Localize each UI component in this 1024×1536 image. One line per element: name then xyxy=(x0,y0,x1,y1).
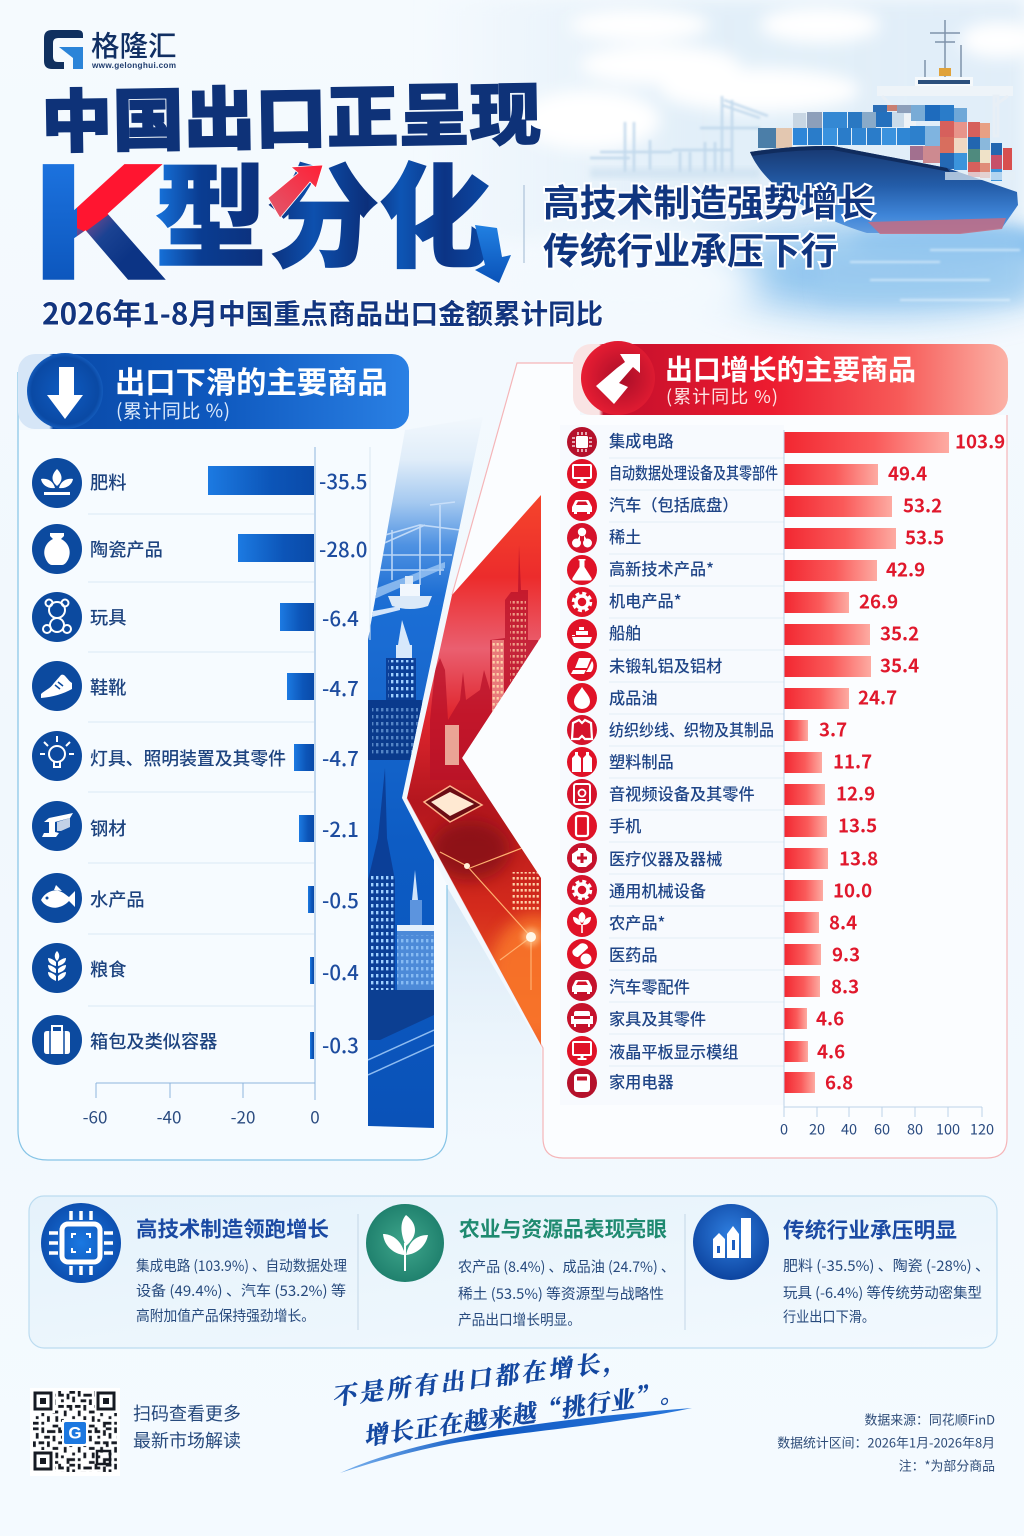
row: 汽车零配件 xyxy=(567,971,859,1001)
bar xyxy=(784,880,823,901)
axis: 0 xyxy=(780,1119,788,1140)
value: 8.3 xyxy=(831,972,859,999)
body text xyxy=(458,1256,675,1330)
bar xyxy=(294,744,314,771)
takeaway: agriculture and resources xyxy=(366,1204,675,1330)
label: 音视频设备及其零件 xyxy=(609,781,755,805)
row tint xyxy=(560,425,784,1105)
value: -4.7 xyxy=(322,742,359,772)
label: 集成电路 xyxy=(609,428,674,452)
handwritten slogan: 不是所有出口都在增长， xyxy=(332,1341,629,1412)
container ship xyxy=(750,20,1018,234)
QR caption xyxy=(133,1400,241,1453)
icon: rare earth xyxy=(567,523,597,553)
takeaway: traditional xyxy=(693,1204,990,1327)
icon: up arrow xyxy=(596,354,640,404)
value: 26.9 xyxy=(859,587,898,614)
panel: takeaways xyxy=(29,1196,997,1348)
low tower xyxy=(368,768,395,1000)
value: -2.1 xyxy=(322,813,359,843)
row: 船舶 xyxy=(567,619,919,649)
label: 箱包及类似容器 xyxy=(90,1028,217,1054)
bar xyxy=(784,432,949,453)
handwritten slogan: 增长正在越来越“挑行业”。 xyxy=(365,1372,686,1452)
port cranes xyxy=(590,96,768,172)
subtitle: 2026年1-8月中国重点商品出口金额累计同比 xyxy=(42,290,603,333)
value: 10.0 xyxy=(833,876,872,903)
body text: 行业出口下滑。 xyxy=(783,1306,875,1327)
row: 陶瓷产品 xyxy=(32,524,367,574)
bar xyxy=(784,624,870,645)
value: 9.3 xyxy=(832,940,860,967)
red K arms city image xyxy=(407,495,541,1045)
panel background xyxy=(18,372,483,1160)
skyline xyxy=(430,545,538,780)
value: 103.9 xyxy=(955,427,1005,454)
row: 家具及其零件 xyxy=(567,1003,844,1033)
axis: 20 xyxy=(809,1119,825,1140)
bar xyxy=(784,688,849,709)
value: 13.5 xyxy=(838,811,877,838)
icon: car xyxy=(567,971,597,1001)
header: falling xyxy=(18,353,409,429)
label: 粮食 xyxy=(90,956,126,982)
icon: audio video xyxy=(567,779,597,809)
icon: monitor xyxy=(567,459,597,489)
label: 汽车零配件 xyxy=(609,974,690,998)
bar xyxy=(784,912,819,933)
value: -6.4 xyxy=(322,602,359,632)
panel frame xyxy=(407,363,1007,1158)
blue K stem city image xyxy=(368,417,483,1128)
title line 2: K型分化 xyxy=(34,128,511,311)
icon: gear xyxy=(567,587,597,617)
row: 通用机械设备 xyxy=(567,875,872,905)
row: 高新技术产品* xyxy=(567,555,925,585)
value: 6.8 xyxy=(825,1068,853,1095)
hull xyxy=(750,146,1018,233)
label: 鞋靴 xyxy=(90,674,126,700)
axis: -60 xyxy=(83,1103,107,1128)
bar xyxy=(784,720,808,741)
big letter K: K xyxy=(34,132,161,311)
icon: fish xyxy=(32,873,82,923)
body text: 玩具 (-6.4%) 等传统劳动密集型 xyxy=(783,1282,982,1303)
value: 12.9 xyxy=(836,779,875,806)
heading: 农业与资源品表现亮眼 xyxy=(459,1212,667,1244)
label: 水产品 xyxy=(90,886,145,912)
bar xyxy=(784,944,821,965)
row: 灯具、照明装置及其零件 xyxy=(32,731,359,781)
body text: 高附加值产品保持强劲增长。 xyxy=(136,1305,315,1326)
heading: 高技术制造领跑增长 xyxy=(136,1212,329,1244)
label: 肥料 xyxy=(90,469,126,495)
header title: 出口增长的主要商品 xyxy=(665,348,916,388)
QR caption: 扫码查看更多 xyxy=(133,1400,241,1426)
QR code xyxy=(30,1388,120,1476)
label: 高新技术产品* xyxy=(609,556,714,580)
value: 35.4 xyxy=(880,651,919,678)
lower glow xyxy=(430,820,510,880)
label: 家用电器 xyxy=(609,1069,674,1093)
axis: 100 xyxy=(936,1119,960,1140)
icon: monitor xyxy=(567,1036,597,1066)
source notes xyxy=(777,1410,995,1475)
bar xyxy=(784,976,820,997)
icon: plant xyxy=(366,1204,444,1282)
icon: teddy bear xyxy=(32,592,82,642)
icon: sofa xyxy=(567,1003,597,1033)
icon: ship xyxy=(567,619,597,649)
logo wordmark: 格隆汇 xyxy=(91,24,177,65)
logo mark xyxy=(44,30,83,69)
value: -0.5 xyxy=(322,884,359,914)
bar chart: rising xyxy=(567,427,1005,1140)
logo url: www.gelonghui.com xyxy=(91,61,176,70)
icon: chip xyxy=(41,1203,121,1283)
bar xyxy=(784,496,892,517)
bar xyxy=(208,466,314,495)
value: 11.7 xyxy=(833,747,872,774)
panel: exports falling xyxy=(18,353,483,1160)
bar xyxy=(784,1072,815,1093)
blue down arrow xyxy=(475,225,511,283)
value: -0.4 xyxy=(322,956,359,986)
panel background xyxy=(407,363,1007,1158)
source notes: 注：*为部分商品 xyxy=(899,1456,995,1475)
value: 3.7 xyxy=(819,715,847,742)
label: 通用机械设备 xyxy=(609,878,706,902)
label: 玩具 xyxy=(90,604,126,630)
bar xyxy=(784,528,896,549)
bar xyxy=(287,673,314,700)
bar xyxy=(310,957,314,984)
headline: high-tech and traditional xyxy=(543,173,874,275)
logo: 格隆汇 xyxy=(44,24,177,70)
bar xyxy=(784,464,878,485)
axis: 80 xyxy=(907,1119,923,1140)
card background xyxy=(29,1196,997,1348)
icon: home appliance xyxy=(567,1068,597,1098)
label: 钢材 xyxy=(90,815,126,841)
icon: gear xyxy=(567,875,597,905)
label: 船舶 xyxy=(609,620,641,644)
centre shading below K xyxy=(447,887,543,1160)
bar xyxy=(299,815,314,842)
row: 鞋靴 xyxy=(32,661,359,711)
bar xyxy=(784,1041,808,1062)
row: 自动数据处理设备及其零部件 xyxy=(567,459,927,489)
bar xyxy=(280,603,314,631)
row: 医药品 xyxy=(567,939,860,969)
icon: jacket xyxy=(567,715,597,745)
panel frame xyxy=(18,372,447,1160)
takeaway: high-tech xyxy=(41,1203,347,1326)
row: 汽车（包括底盘） xyxy=(567,491,942,521)
title line 1: 中国出口正呈现 xyxy=(40,59,542,166)
QR caption: 最新市场解读 xyxy=(133,1427,241,1453)
icon: shoe xyxy=(32,661,82,711)
value: -35.5 xyxy=(319,465,367,495)
bar xyxy=(308,886,314,913)
axis: 60 xyxy=(874,1119,890,1140)
label: 汽车（包括底盘） xyxy=(609,492,738,516)
value: -0.3 xyxy=(322,1029,359,1059)
axis xyxy=(780,430,994,1140)
row: 箱包及类似容器 xyxy=(32,1015,359,1065)
icon: wheat xyxy=(32,943,82,993)
value: 4.6 xyxy=(816,1004,844,1031)
bar xyxy=(784,656,871,677)
header: rising xyxy=(573,341,1008,415)
bar xyxy=(784,848,828,869)
axis xyxy=(83,447,320,1128)
icon: steel beam xyxy=(32,801,82,851)
icon: flask xyxy=(567,555,597,585)
row: 粮食 xyxy=(32,943,359,993)
row: 音视频设备及其零件 xyxy=(567,779,875,809)
icon: oil drop xyxy=(567,683,597,713)
value: 35.2 xyxy=(880,619,919,646)
value: -28.0 xyxy=(319,533,367,563)
row: 纺织纱线、织物及其制品 xyxy=(567,715,847,745)
bar xyxy=(784,592,849,613)
label: 塑料制品 xyxy=(609,749,674,773)
label: 农产品* xyxy=(609,910,665,934)
row: 医疗仪器及器械 xyxy=(567,843,878,873)
axis: -40 xyxy=(157,1103,181,1128)
icon: sprout xyxy=(32,458,82,508)
icon: car xyxy=(567,491,597,521)
body text: 产品出口增长明显。 xyxy=(458,1309,581,1330)
label: 未锻轧铝及铝材 xyxy=(609,653,722,677)
label: 自动数据处理设备及其零部件 xyxy=(609,460,778,484)
row: 塑料制品 xyxy=(567,747,872,777)
source notes: 数据统计区间：2026年1月-2026年8月 xyxy=(777,1433,995,1452)
body text xyxy=(136,1255,347,1326)
handwritten slogan xyxy=(332,1341,686,1452)
headline: high-tech and traditional: 传统行业承压下行 xyxy=(543,221,837,275)
label: 手机 xyxy=(609,813,641,837)
body text: 集成电路 (103.9%) 、自动数据处理 xyxy=(136,1255,347,1276)
icon: light bulb xyxy=(32,731,82,781)
icon: leaf xyxy=(567,907,597,937)
icon: down arrow xyxy=(47,367,83,419)
hero background: sky, port, container ship and sea xyxy=(420,0,1024,340)
axis: 0 xyxy=(310,1103,320,1128)
bar xyxy=(784,784,825,805)
finder squares xyxy=(33,1391,117,1472)
label: 陶瓷产品 xyxy=(90,536,163,562)
header badge xyxy=(27,353,103,429)
row: 钢材 xyxy=(32,801,359,851)
bar xyxy=(784,752,822,773)
icon: pill xyxy=(567,939,597,969)
row: 未锻轧铝及铝材 xyxy=(567,651,919,681)
body text xyxy=(783,1255,990,1327)
value: 24.7 xyxy=(858,683,897,710)
ship xyxy=(388,596,432,609)
label: 医疗仪器及器械 xyxy=(609,846,722,870)
icon: vase xyxy=(32,524,82,574)
bar xyxy=(784,560,877,581)
label: 灯具、照明装置及其零件 xyxy=(90,745,286,771)
bar xyxy=(310,1032,314,1059)
icon: factory buildings xyxy=(693,1204,769,1280)
型分化: 型分化 xyxy=(155,128,491,290)
label: 稀土 xyxy=(609,524,641,548)
row: 手机 xyxy=(567,811,877,841)
icon: phone xyxy=(567,811,597,841)
bar chart: falling xyxy=(32,447,370,1128)
bar xyxy=(784,816,827,837)
value: 8.4 xyxy=(829,908,857,935)
axis: 40 xyxy=(841,1119,857,1140)
axis: -20 xyxy=(231,1103,255,1128)
label: 家具及其零件 xyxy=(609,1006,706,1030)
port xyxy=(374,502,460,585)
label: 液晶平板显示模组 xyxy=(609,1039,738,1063)
row: 玩具 xyxy=(32,592,359,642)
header title: 出口下滑的主要商品 xyxy=(115,358,388,402)
headline: high-tech and traditional: 高技术制造强势增长 xyxy=(543,173,874,227)
chip xyxy=(424,786,482,822)
body text: 农产品 (8.4%) 、成品油 (24.7%) 、 xyxy=(458,1256,675,1277)
header badge xyxy=(581,341,655,415)
value: 42.9 xyxy=(886,555,925,582)
axis: 120 xyxy=(970,1119,994,1140)
row: 水产品 xyxy=(32,873,359,923)
bar xyxy=(784,1008,807,1029)
label: 成品油 xyxy=(609,685,658,709)
value: -4.7 xyxy=(322,672,359,702)
red up arrow xyxy=(268,165,323,218)
row: 稀土 xyxy=(567,523,944,553)
mast and bridge xyxy=(925,20,961,80)
heading: 传统行业承压明显 xyxy=(783,1214,957,1244)
header note: (累计同比 %) xyxy=(116,396,230,423)
label: 纺织纱线、织物及其制品 xyxy=(609,717,774,741)
brush stroke underline xyxy=(340,1408,692,1473)
panel: exports rising xyxy=(407,341,1008,1158)
row: 农产品* xyxy=(567,907,857,937)
tower xyxy=(396,620,412,658)
row: 肥料 xyxy=(32,458,367,508)
label: 医药品 xyxy=(609,942,658,966)
row: 机电产品* xyxy=(567,587,898,617)
value: 53.2 xyxy=(903,491,942,518)
row: 家用电器 xyxy=(567,1068,853,1098)
value: 13.8 xyxy=(839,844,878,871)
icon: bottles xyxy=(567,747,597,777)
row: 集成电路 xyxy=(567,427,1005,457)
headline divider xyxy=(523,185,525,263)
body text: 稀土 (53.5%) 等资源型与战略性 xyxy=(458,1283,664,1304)
row: 液晶平板显示模组 xyxy=(567,1036,845,1066)
icon: ingot xyxy=(567,651,597,681)
icon: medical cross xyxy=(567,843,597,873)
label: 机电产品* xyxy=(609,588,682,612)
body text: 设备 (49.4%) 、汽车 (53.2%) 等 xyxy=(136,1280,346,1301)
source notes: 数据来源：同花顺FinD xyxy=(864,1410,995,1429)
icon: suitcase xyxy=(32,1015,82,1065)
body text: 肥料 (-35.5%) 、陶瓷 (-28%) 、 xyxy=(783,1255,990,1276)
row: 成品油 xyxy=(567,683,897,713)
icon: chip xyxy=(567,427,597,457)
header note: (累计同比 %) xyxy=(666,383,778,409)
QR logo: G xyxy=(68,1423,82,1442)
containers xyxy=(758,105,1012,181)
value: 4.6 xyxy=(817,1037,845,1064)
value: 53.5 xyxy=(905,523,944,550)
value: 49.4 xyxy=(888,459,927,486)
bar xyxy=(238,534,314,562)
